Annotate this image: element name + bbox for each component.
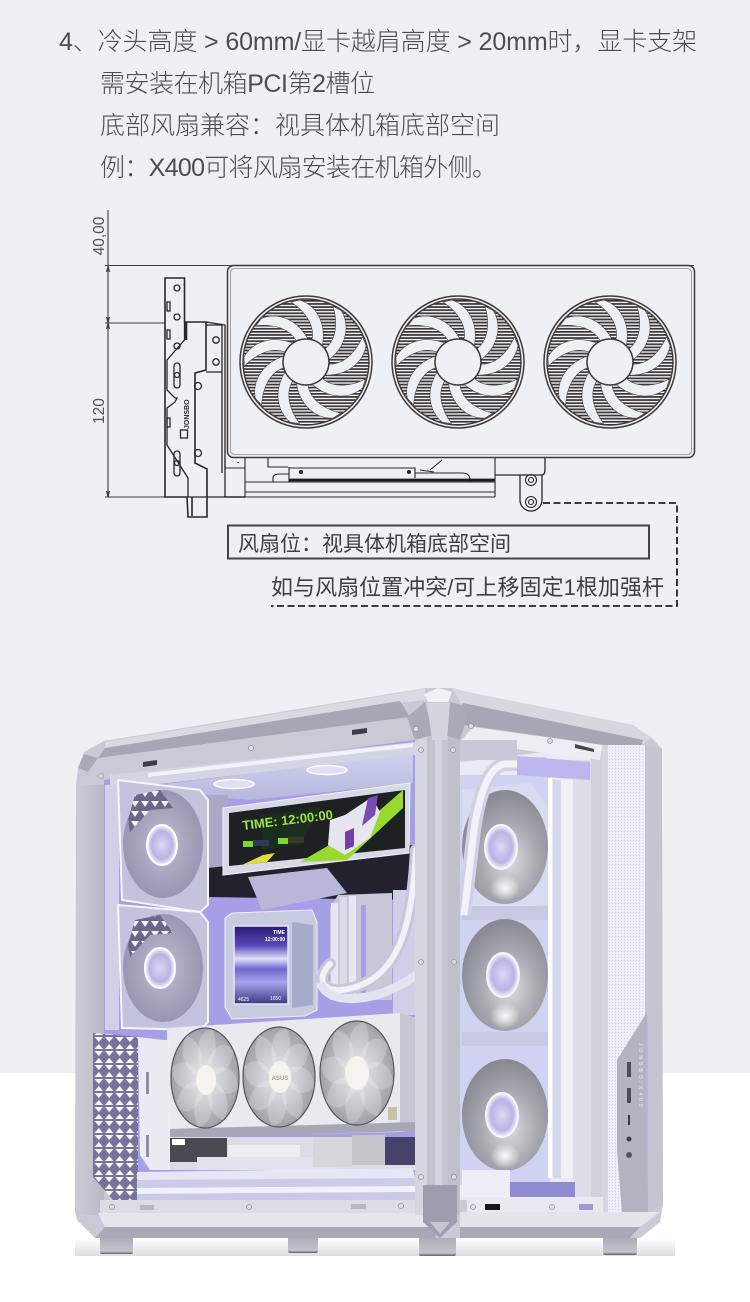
LCD water-block display: 1650 [270, 996, 281, 1002]
central pillar [407, 688, 470, 1238]
heading text: compatibility notes [59, 28, 697, 182]
left top rail [78, 688, 425, 775]
dimension label 40,00: 40,00 [91, 216, 108, 255]
case silhouette [75, 688, 663, 1238]
left side fan 2 [105, 905, 208, 1030]
floor shadow [75, 1238, 675, 1256]
coolant tubes [322, 850, 416, 999]
LCD water-block display: TIME [273, 930, 286, 936]
IO panel [617, 1012, 648, 1213]
dimension label 120: 120 [91, 398, 108, 424]
bottom rail [95, 1200, 440, 1238]
LCD water-block display: 4625 [238, 997, 249, 1003]
motherboard dark zone [208, 795, 416, 1015]
right side strips [548, 750, 602, 1205]
graphics card [167, 1013, 417, 1138]
right tube [464, 764, 547, 915]
left interior background [104, 740, 418, 1175]
front mesh panel [602, 745, 663, 1213]
bottom slats [137, 1168, 415, 1200]
top radiator fan slab [110, 742, 415, 800]
heading text: compatibility notes: 4、冷头高度 > 60mm/显卡越肩高度 > 20mm时，显卡支架 [59, 28, 697, 56]
fan 1 [240, 296, 372, 428]
feet [100, 1236, 637, 1256]
heading text: compatibility notes: 底部风扇兼容：视具体机箱底部空间 [100, 112, 500, 140]
screen bar with dashboard [223, 783, 410, 875]
LCD water-block display: 12:00:00 [265, 937, 285, 943]
LCD water-block display [225, 910, 317, 1019]
fan 3 [544, 296, 676, 428]
perforated mesh panel [93, 1033, 138, 1200]
bracket logo: JONSBO [184, 399, 191, 429]
graphics card shroud [228, 266, 694, 458]
fan 2 [392, 296, 524, 428]
callout box: fan position [228, 526, 649, 558]
PCI bracket [138, 1037, 170, 1170]
memory and cooler ribs [330, 893, 392, 1000]
callout box: fan position: 风扇位：视具体机箱底部空间 [238, 533, 511, 556]
callout note: reinforcement bar: 如与风扇位置冲突/可上移固定1根加强杆 [271, 575, 664, 600]
technical drawing: GPU with support bracket [91, 210, 694, 606]
IO panel: JONSBO/X400 [637, 1043, 643, 1110]
left frame post [77, 785, 104, 1215]
right fans housing [460, 775, 550, 1185]
graphics card: ASUS [272, 1076, 288, 1082]
screen bar with dashboard: TIME: 12:00:00 [242, 807, 334, 833]
dashed callout leader [271, 503, 677, 606]
left side fan 1 [105, 780, 208, 912]
heading text: compatibility notes: 例：X400可将风扇安装在机箱外侧。 [100, 154, 497, 182]
heading text: compatibility notes: 需安装在机箱PCI第2槽位 [100, 70, 375, 98]
screws [98, 724, 554, 1210]
right window interior [460, 745, 602, 1200]
mainboard lower area [170, 1135, 417, 1170]
right top rail [450, 688, 652, 780]
dimension lines [105, 210, 694, 497]
bracket [165, 278, 245, 517]
product photo: PC case [75, 688, 663, 1256]
card underside and baseplate [225, 458, 545, 511]
right bottom rail [460, 1170, 660, 1238]
